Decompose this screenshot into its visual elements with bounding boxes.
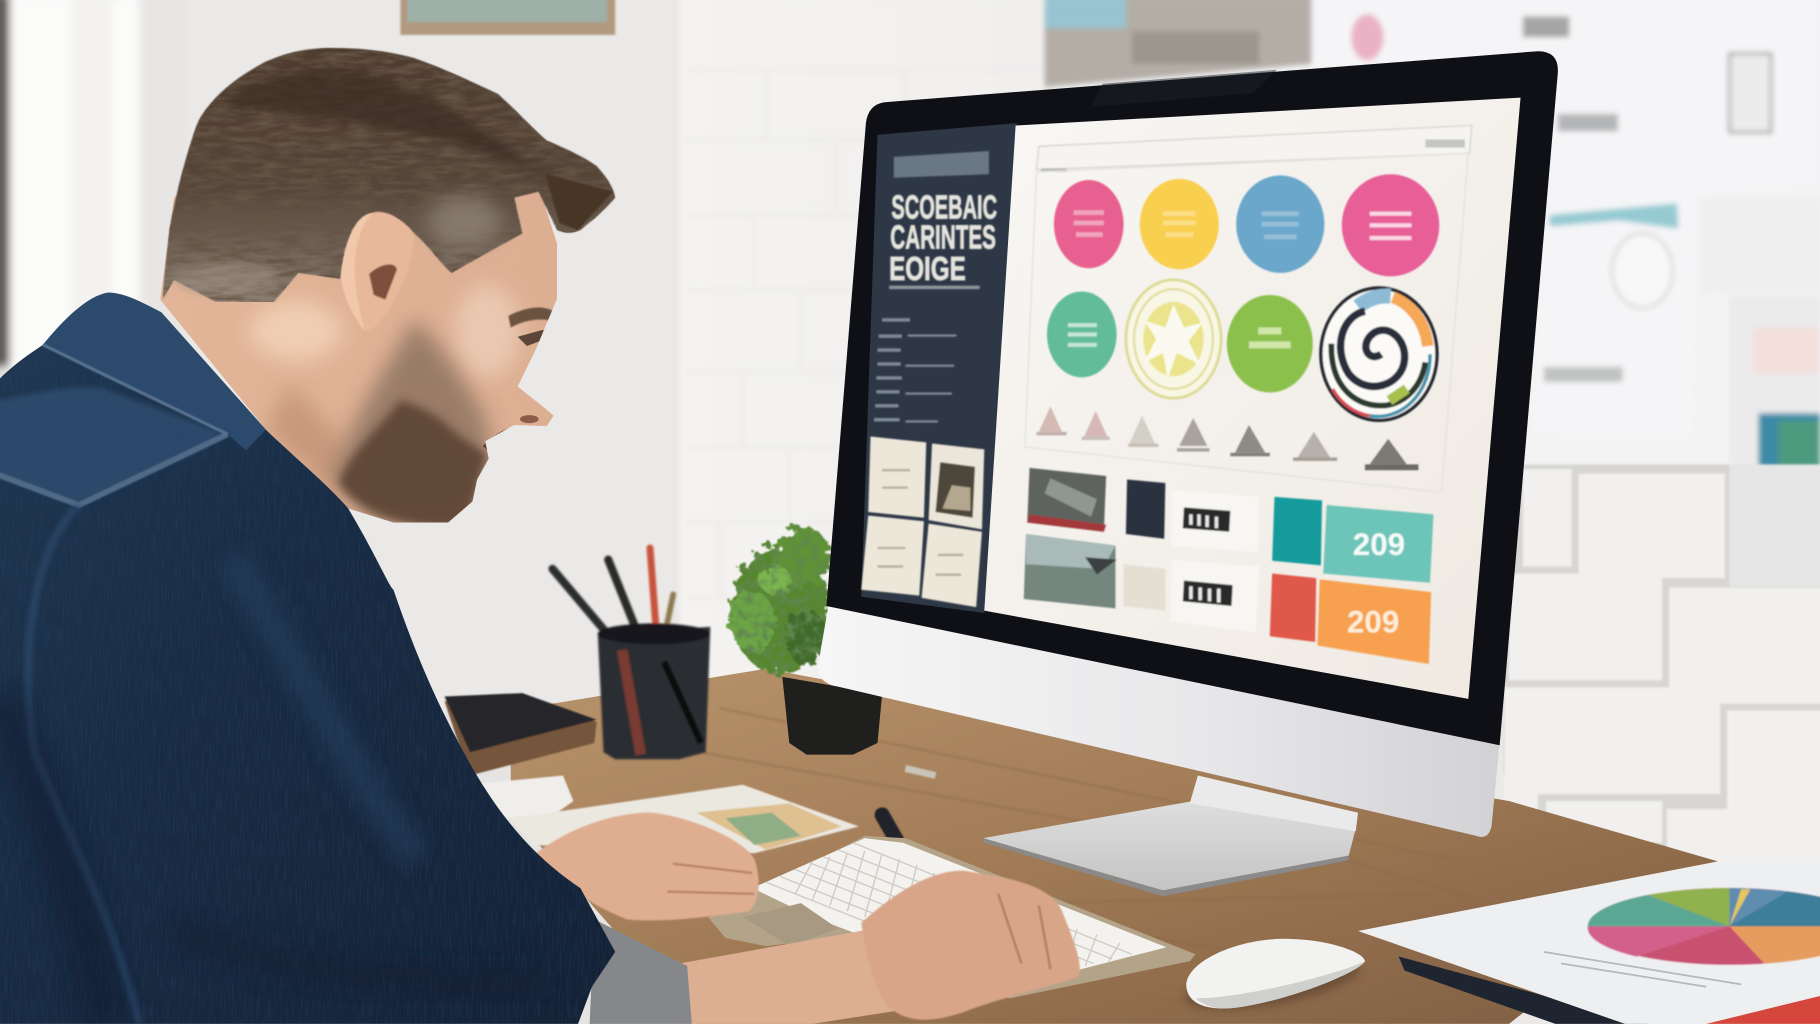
upper stubble bbox=[331, 319, 493, 522]
notebooks stack bbox=[445, 693, 597, 775]
spiral chart bbox=[1321, 288, 1437, 420]
report with pie chart bbox=[1358, 859, 1820, 1024]
photo thumbnail one bbox=[1027, 468, 1106, 532]
nostril bbox=[520, 415, 539, 423]
logo row bbox=[1037, 406, 1418, 470]
circle: pink one bbox=[1054, 180, 1124, 268]
monitor stand bbox=[983, 775, 1358, 896]
fringe tip bbox=[546, 174, 613, 230]
shirt cuff bbox=[590, 919, 692, 1024]
collar seam bbox=[43, 345, 228, 434]
beard bbox=[339, 401, 488, 528]
wireframe frame bbox=[1025, 153, 1468, 492]
grey nape bbox=[174, 262, 279, 295]
pencils bbox=[552, 548, 673, 650]
white brick pattern, centre wall bbox=[685, 70, 1045, 598]
sleeve shading bbox=[28, 505, 139, 1024]
bezel reflection bbox=[1091, 70, 1277, 107]
tile: orange with number bbox=[1317, 579, 1431, 664]
circle: green bbox=[1227, 295, 1313, 392]
jacket collar bbox=[43, 293, 266, 450]
circle: blue bbox=[1236, 175, 1324, 273]
browser bar bbox=[1037, 125, 1472, 170]
yoke seam bbox=[0, 434, 227, 505]
barcode label one bbox=[1183, 507, 1230, 532]
window and curtain bbox=[0, 0, 139, 377]
forearm bbox=[679, 923, 917, 1024]
eyebrow and eye bbox=[508, 307, 555, 327]
circle: teal bbox=[1047, 291, 1117, 377]
grey temple bbox=[427, 195, 501, 246]
dark label tile bbox=[1126, 480, 1165, 539]
sidebar heading text bbox=[889, 189, 997, 288]
tile: dark teal bbox=[1272, 497, 1322, 565]
sidebar heading text: EOIGE bbox=[889, 251, 966, 288]
cheek highlight bbox=[455, 284, 520, 377]
label card two bbox=[1170, 560, 1259, 633]
circle: yellow bbox=[1140, 179, 1219, 269]
circle: yellow emblem bbox=[1126, 280, 1221, 398]
monitor bbox=[818, 51, 1558, 837]
monitor bezel bbox=[826, 51, 1558, 745]
sidebar heading text: CARINTES bbox=[890, 220, 996, 257]
paper swatch bbox=[1124, 564, 1165, 611]
denim jacket bbox=[0, 293, 615, 1024]
yoke panel bbox=[0, 387, 227, 505]
hair bbox=[162, 48, 615, 302]
man bbox=[0, 48, 1080, 1024]
label card one bbox=[1171, 490, 1259, 553]
sidebar list bbox=[874, 318, 956, 423]
moustache bbox=[483, 428, 508, 450]
sidebar tag bbox=[894, 151, 989, 178]
dashboard content bbox=[1024, 125, 1472, 664]
mouse bbox=[1182, 939, 1365, 1019]
neck highlight bbox=[250, 301, 342, 361]
left hand on keyboard bbox=[532, 813, 759, 920]
potted plant bbox=[729, 527, 882, 755]
keyboard bbox=[708, 836, 1196, 998]
tile: light teal with number: 209 bbox=[1353, 527, 1405, 562]
pie chart bbox=[1588, 888, 1820, 965]
tile: light teal with number bbox=[1323, 505, 1433, 583]
sidebar content bbox=[861, 151, 997, 607]
monitor chin bbox=[818, 604, 1500, 837]
photo thumbnail two bbox=[1024, 534, 1115, 608]
screen content panel bbox=[984, 98, 1521, 699]
sidebar heading text: SCOEBAIC bbox=[891, 189, 997, 226]
sidebar cards bbox=[868, 437, 926, 518]
right hand on keyboard bbox=[861, 871, 1080, 1020]
circle: pink two bbox=[1342, 174, 1439, 276]
pencil holder bbox=[552, 548, 710, 759]
framed picture bbox=[400, 0, 615, 35]
neck shadow bbox=[266, 387, 342, 498]
ear bbox=[340, 213, 414, 331]
tile: red bbox=[1270, 574, 1316, 642]
pinned posters upper right bbox=[1045, 0, 1820, 580]
brick wall lower right bbox=[1503, 464, 1820, 871]
small desk items: notepad, papers, pen bbox=[478, 769, 936, 853]
neck and face bbox=[160, 191, 557, 522]
barcode label two bbox=[1183, 580, 1233, 606]
dark upper hair sweep bbox=[221, 70, 569, 192]
wooden desk bbox=[511, 669, 1718, 1024]
dark sidebar panel bbox=[861, 123, 1017, 613]
tile: orange with number: 209 bbox=[1347, 605, 1399, 640]
